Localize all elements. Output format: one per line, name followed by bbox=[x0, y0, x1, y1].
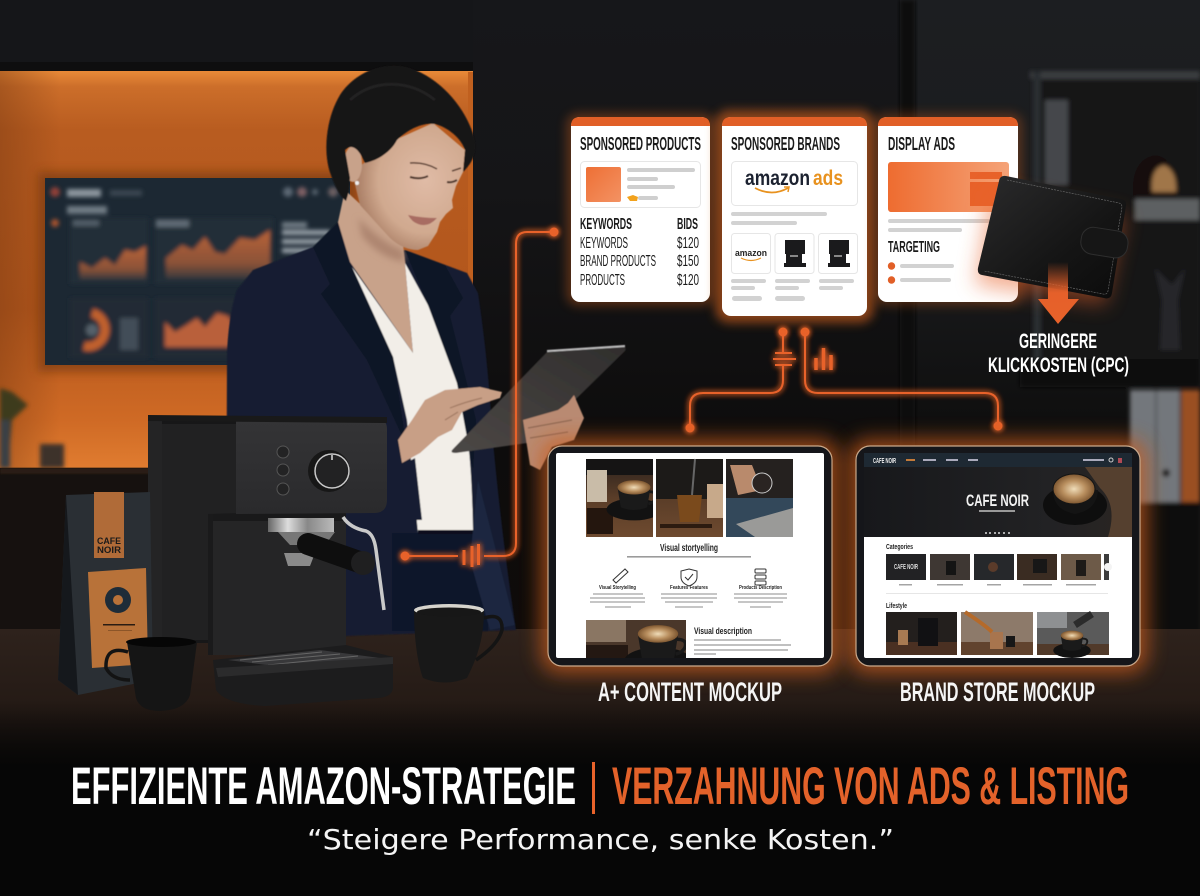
tablet: A+ content mockup: Visual description bbox=[694, 626, 752, 637]
label: lower click cost: KLICKKOSTEN (CPC) bbox=[988, 354, 1129, 377]
panel: sponsored brands bbox=[715, 110, 874, 323]
blazer bbox=[226, 222, 516, 640]
arrow: lower cost bbox=[1038, 262, 1079, 324]
panel: sponsored brands: SPONSORED BRANDS bbox=[731, 134, 840, 154]
tablet: brand store mockup bbox=[849, 439, 1147, 673]
tablet: brand store mockup: Categories bbox=[886, 544, 913, 551]
label: A+ content mockup: A+ CONTENT MOCKUP bbox=[598, 677, 782, 707]
lifestyle photos bbox=[886, 612, 1109, 658]
keyword table bbox=[580, 216, 699, 289]
shirt bbox=[352, 263, 473, 533]
title: EFFIZIENTE AMAZON-STRATEGIE bbox=[71, 757, 576, 816]
eyes, brows, lips bbox=[410, 176, 457, 182]
label: lower click cost: GERINGERE bbox=[1019, 330, 1097, 353]
hero: CAFE NOIR bbox=[966, 491, 1029, 510]
drip tray bbox=[213, 645, 393, 706]
head bbox=[162, 424, 240, 640]
connector: left line bbox=[402, 228, 558, 567]
face bbox=[352, 123, 465, 250]
photo row bbox=[586, 459, 793, 537]
plant and ornament on sideboard bbox=[0, 388, 64, 468]
sideboard bbox=[0, 468, 160, 633]
coffee bag bbox=[58, 492, 153, 695]
amazon ads logo: ads bbox=[813, 167, 843, 190]
panel: display ads bbox=[873, 113, 1023, 306]
keyword table: PRODUCTS bbox=[580, 272, 625, 289]
keyword table: $120 bbox=[677, 235, 699, 252]
keyword table: BRAND PRODUCTS bbox=[580, 253, 656, 270]
hand on tablet bbox=[398, 387, 502, 463]
panel: sponsored products bbox=[566, 113, 715, 306]
panel: sponsored products: SPONSORED PRODUCTS bbox=[580, 134, 701, 154]
trousers bbox=[392, 533, 488, 631]
feature columns: Visual Storytelling bbox=[599, 585, 636, 591]
back tower bbox=[148, 418, 240, 643]
panel: display ads: DISPLAY ADS bbox=[888, 134, 955, 154]
tiles: amazon bbox=[735, 248, 767, 259]
tablet bbox=[452, 347, 626, 453]
connector: top branches bbox=[686, 328, 1002, 432]
hero bbox=[864, 467, 1132, 537]
amazon ads logo bbox=[732, 162, 858, 206]
supporting hand bbox=[523, 395, 584, 470]
ear bbox=[344, 146, 362, 182]
panel: display ads: TARGETING bbox=[888, 239, 940, 256]
handle bbox=[308, 544, 362, 563]
coffee bag: NOIR bbox=[97, 545, 122, 555]
shelf bbox=[1020, 71, 1200, 640]
label: lower click cost bbox=[988, 330, 1129, 377]
bottom image bbox=[586, 620, 686, 658]
subtitle: “Steigere Performance, senke Kosten.” bbox=[307, 823, 894, 856]
group head bbox=[268, 518, 334, 532]
display banner bbox=[888, 162, 1009, 212]
black mug right bbox=[414, 604, 502, 682]
black cup front left bbox=[106, 637, 197, 711]
lapels bbox=[313, 222, 410, 470]
nav bar: CAFE NOIR bbox=[873, 458, 896, 465]
feature columns bbox=[590, 569, 787, 607]
cuff bbox=[395, 440, 422, 520]
dial bbox=[308, 450, 350, 492]
keyword table: $120 bbox=[677, 272, 699, 289]
tablet: A+ content mockup bbox=[541, 439, 839, 674]
tiles bbox=[732, 234, 858, 274]
orange wall niche bbox=[0, 71, 473, 468]
wall monitor with dashboard bbox=[38, 172, 358, 372]
product preview bbox=[580, 162, 700, 208]
tablet: brand store mockup: Lifestyle bbox=[886, 603, 907, 610]
section heading: Visual stortyelling bbox=[660, 543, 718, 554]
woman bbox=[226, 66, 626, 640]
category tiles: CAFE NOIR bbox=[894, 564, 918, 571]
feature columns: Features Features bbox=[670, 585, 708, 591]
wood table bbox=[0, 629, 1200, 764]
category tiles bbox=[886, 554, 1112, 586]
blazer front flap bbox=[470, 480, 515, 630]
keyword table: KEYWORDS bbox=[580, 216, 632, 233]
coffee bag: CAFE bbox=[97, 536, 121, 546]
nav bar bbox=[864, 453, 1132, 467]
icon: wallet bbox=[975, 176, 1130, 305]
keyword table: KEYWORDS bbox=[580, 235, 628, 252]
keyword table: $150 bbox=[677, 253, 699, 270]
center panel bbox=[208, 513, 346, 655]
espresso machine bbox=[148, 415, 393, 706]
amazon ads logo: amazon bbox=[745, 167, 810, 190]
keyword table: BIDS bbox=[677, 216, 698, 233]
control buttons bbox=[277, 446, 289, 495]
feature columns: Products Description bbox=[739, 585, 782, 591]
hair bbox=[326, 66, 475, 201]
steam wand bbox=[343, 517, 384, 610]
neck bbox=[338, 190, 413, 353]
